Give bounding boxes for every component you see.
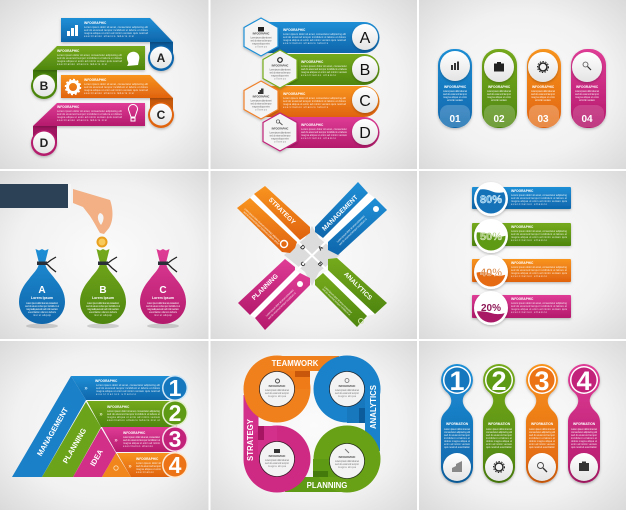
ribbon C: Lorem ipsum dolor sit amet, consectetur adipiscing elit — [84, 82, 148, 86]
bar 20%: magna aliqua ut enim ad minim veniam quis — [511, 307, 568, 311]
hexagon A: magna aliqua enim — [252, 42, 270, 46]
level 2 planning: PLANNING — [61, 426, 88, 465]
bag C: nisi ut aliquip — [154, 313, 173, 317]
bar C: sed do eiusmod tempor incididunt ut labore et dolore — [283, 99, 347, 103]
level 3 idea: » — [114, 438, 118, 444]
card 02: ad minim veniam — [491, 98, 507, 102]
bag B: Lorem ipsum dolor sit amet, consectetur — [87, 301, 119, 305]
bag A: Lorem Ipsum — [31, 296, 53, 300]
blue loop: INFOGRAPHIC — [339, 385, 356, 388]
centre tiles: D — [298, 244, 306, 252]
bottle 3: INFORMATION — [531, 422, 554, 426]
level 3 idea: sed do eiusmod tempor incididunt ut — [123, 438, 160, 442]
green band — [285, 477, 347, 492]
panel: ribbon steps A-D — [0, 0, 208, 169]
bottle 2: consectetur adipiscing elit — [486, 430, 512, 434]
level 1 management: magna aliqua ut enim ad minim veniam quis nostrud — [96, 389, 161, 393]
ribbon D: exercitation ullamco laboris nisi — [57, 118, 107, 122]
bag B: B — [99, 285, 107, 296]
bar 20%: 20% — [481, 303, 501, 314]
arm: planning: Lorem ipsum dolor sit amet consectetur — [265, 288, 295, 317]
card 02 — [482, 49, 517, 128]
bag B: sed do eiusmod tempor incididunt ut — [86, 304, 120, 308]
pink loop: magna aliqua — [268, 465, 287, 468]
ribbon B: sed do eiusmod tempor incididunt ut labore et dolore — [57, 56, 123, 60]
bar C: C — [359, 93, 371, 110]
bar C: Lorem ipsum dolor sit amet, consectetur adipiscing elit — [283, 96, 346, 100]
arm: analytics: Lorem ipsum dolor sit amet consectetur — [323, 285, 353, 314]
card 03: ad minim veniam — [535, 98, 551, 102]
orange loop: magna aliqua — [268, 395, 287, 398]
hexagon D: ullamco — [274, 140, 287, 144]
bar 50%: Lorem ipsum dolor sit amet, consectetur adipiscing — [511, 229, 568, 233]
card 04: magna aliqua ut enim — [575, 95, 599, 99]
sleeve and hand — [0, 184, 112, 234]
bar D: Lorem ipsum dolor sit amet, consectetur — [301, 127, 347, 131]
bar D: magna aliqua ut enim ad minim veniam — [301, 133, 347, 137]
bottle 2: incididunt ut labore et — [486, 436, 512, 440]
hexagon A: sed do eiusmod tempor — [250, 40, 272, 42]
panel: hexagon bars A-D — [210, 0, 417, 169]
number circle 4 — [162, 452, 188, 478]
bar 80%: Lorem ipsum dolor sit amet, consectetur adipiscing — [511, 193, 568, 197]
level 2 planning: magna aliqua ut enim ad minim veniam — [107, 415, 160, 419]
label: analytics: ANALYTICS — [369, 385, 378, 429]
number circle 3 — [162, 426, 188, 452]
bar 50%: INFOGRAPHIC — [511, 225, 534, 229]
level 3 idea: exercitation ullamco — [123, 444, 154, 448]
bar 80%: 80% — [480, 194, 502, 206]
bar A: A — [360, 30, 371, 47]
label: planning: PLANNING — [307, 481, 347, 490]
ribbon C: magna aliqua ut enim ad minim veniam quis nostrud — [84, 88, 149, 92]
bottle 4: INFORMATION — [573, 422, 596, 426]
level 4 triangle: sed do eiusmod tempor — [136, 464, 161, 468]
card 03: INFOGRAPHIC — [532, 85, 555, 89]
level 1 management — [12, 376, 177, 477]
card 02: INFOGRAPHIC — [488, 85, 511, 89]
bag C: magna aliqua ut enim ad minim veniam — [147, 307, 179, 311]
bottle 1: consectetur adipiscing elit — [444, 430, 470, 434]
bottle 1: Lorem ipsum dolor sit amet — [444, 427, 470, 431]
hexagon B: magna aliqua enim — [271, 74, 289, 78]
card 01: 01 — [449, 114, 461, 125]
hexagon C: INFOGRAPHIC — [253, 96, 270, 98]
bottle 2: quis nostrud exercitation — [486, 445, 513, 449]
pink loop: Lorem ipsum dolor sit amet — [265, 459, 289, 462]
hexagon D: magna aliqua enim — [271, 138, 289, 140]
green loop: Lorem ipsum dolor sit amet — [335, 460, 359, 463]
bottle 2: 2 — [491, 366, 507, 396]
ribbon C: INFOGRAPHIC — [84, 78, 107, 82]
card 03: sed do eiusmod tempor — [531, 92, 555, 96]
level 1 management: » — [84, 386, 88, 392]
card 01: Lorem ipsum dolor sit amet — [443, 89, 467, 93]
card 02: 02 — [493, 114, 505, 125]
card 01: sed do eiusmod tempor — [443, 92, 467, 96]
ribbon A: INFOGRAPHIC — [84, 21, 107, 25]
number circle 2 — [162, 400, 188, 426]
bag B: nisi ut aliquip — [94, 313, 113, 317]
bar 80% — [472, 182, 571, 220]
bottle 2: dolore magna aliqua ut — [486, 439, 512, 443]
bottle 3: incididunt ut labore et — [529, 436, 555, 440]
label: strategy: STRATEGY — [246, 418, 255, 461]
arm: planning: PLANNING — [251, 273, 280, 302]
hexagon B — [263, 50, 297, 88]
bottle 1: dolore magna aliqua ut — [444, 439, 470, 443]
card 02: Lorem ipsum dolor sit amet — [487, 89, 511, 93]
bag A — [19, 249, 65, 328]
ribbon A: A — [157, 51, 166, 65]
bar D: D — [359, 125, 371, 142]
number circle 4: 4 — [169, 452, 182, 478]
orange loop — [244, 356, 310, 422]
level 1 management: exercitation ullamco — [96, 392, 137, 396]
ribbon A: sed do eiusmod tempor incididunt ut labore et dolore — [84, 28, 149, 32]
green loop: INFOGRAPHIC — [339, 456, 356, 459]
arm: analytics: sed do eiusmod tempor incididunt ut — [321, 287, 352, 317]
arm: management: sed do eiusmod tempor incididunt ut — [338, 217, 368, 246]
bar C: exercitation ullamco laboris — [283, 105, 329, 109]
bag C: Lorem ipsum dolor sit amet, consectetur — [147, 301, 179, 305]
bar 20%: sed do eiusmod tempor incididunt ut labore et — [511, 304, 567, 308]
blue band — [365, 389, 380, 451]
hexagon C — [244, 81, 278, 119]
number circle 3: 3 — [169, 426, 181, 452]
arm: strategy — [237, 186, 310, 253]
card 01: INFOGRAPHIC — [444, 85, 467, 89]
arm: strategy: STRATEGY — [267, 197, 297, 227]
orange band — [277, 356, 339, 371]
bottle 3: consectetur adipiscing elit — [529, 430, 555, 434]
hexagon C: magna aliqua enim — [252, 106, 270, 108]
centre tiles: A — [318, 245, 325, 252]
level 3 idea — [73, 427, 177, 477]
orange loop: Lorem ipsum dolor sit amet — [265, 389, 289, 392]
panel: pyramid — [0, 341, 208, 510]
bag B: exercitation ullamco laboris — [89, 310, 118, 314]
bag B: Lorem Ipsum — [92, 296, 114, 300]
card 04: sed do eiusmod tempor — [575, 92, 599, 96]
card 03 — [527, 49, 561, 128]
bar 40% — [472, 255, 571, 292]
card 04: Lorem ipsum dolor sit amet — [575, 89, 599, 93]
ribbon D: INFOGRAPHIC — [57, 105, 80, 109]
bag C: C — [159, 285, 167, 296]
ribbon B: magna aliqua ut enim ad minim veniam quis nostrud — [57, 59, 123, 63]
level 4 triangle: Lorem ipsum dolor sit — [136, 461, 161, 465]
bar B: Lorem ipsum dolor sit amet, consectetur — [301, 64, 347, 68]
bar D: exercitation ullamco — [301, 136, 337, 140]
bar 80%: sed do eiusmod tempor incididunt ut labore et — [511, 196, 567, 200]
bar D: INFOGRAPHIC — [301, 123, 324, 127]
hexagon D: INFOGRAPHIC — [272, 128, 289, 130]
orange loop: sed do eiusmod tempor — [265, 392, 289, 395]
ribbon A: exercitation ullamco laboris nisi — [84, 34, 134, 38]
green loop: magna aliqua — [338, 466, 357, 469]
bag C: exercitation ullamco laboris — [149, 310, 178, 314]
bar 80%: exercitation ullamco — [511, 202, 548, 206]
bottle 1: enim ad minim veniam — [444, 442, 470, 446]
hexagon D: sed do eiusmod tempor — [270, 134, 291, 138]
bottle 1 — [441, 364, 473, 483]
bar B: sed do eiusmod tempor incididunt ut labore — [301, 67, 348, 71]
bar 40%: INFOGRAPHIC — [511, 261, 534, 265]
ribbon D: sed do eiusmod tempor incididunt ut labore et dolore — [57, 112, 123, 116]
bar B: magna aliqua ut enim ad minim veniam — [301, 70, 347, 74]
bar B — [285, 54, 379, 85]
card 01: magna aliqua ut enim — [443, 95, 467, 99]
bag C: Lorem Ipsum — [152, 296, 174, 300]
bar 50%: exercitation ullamco — [511, 238, 548, 242]
card 02: sed do eiusmod tempor — [487, 92, 511, 96]
bottle 3: sed do eiusmod tempor — [529, 433, 555, 437]
ribbon C: exercitation ullamco laboris nisi — [84, 91, 134, 95]
bar 40%: Lorem ipsum dolor sit amet, consectetur adipiscing — [511, 265, 568, 269]
hexagon D — [263, 113, 297, 151]
bar B: INFOGRAPHIC — [301, 60, 324, 64]
card 04: INFOGRAPHIC — [576, 85, 599, 89]
hexagon D: Lorem ipsum dolor sit amet — [270, 132, 291, 134]
level 1 management: sed do eiusmod tempor incididunt ut labore et dolore — [96, 386, 161, 390]
green loop: sed do eiusmod tempor — [335, 463, 359, 466]
level 2 planning: exercitation ullamco laboris nisi ut — [107, 418, 160, 422]
arm: planning: sed do eiusmod tempor incididunt ut — [267, 291, 297, 320]
bar 20%: Lorem ipsum dolor sit amet, consectetur adipiscing — [511, 301, 568, 305]
arm: analytics: ANALYTICS — [342, 271, 374, 302]
green loop — [313, 426, 380, 492]
bar 40%: exercitation ullamco — [511, 274, 548, 278]
bottle 2: Lorem ipsum dolor sit amet — [486, 427, 512, 431]
number circle 1: 1 — [169, 375, 182, 401]
ribbon B: Lorem ipsum dolor sit amet, consectetur adipiscing elit — [57, 53, 122, 57]
bottle 2 — [483, 364, 515, 483]
level 1 management: MANAGEMENT — [35, 406, 70, 458]
ribbon D: magna aliqua ut enim ad minim veniam quis nostrud — [57, 115, 123, 119]
panel: percentage bars — [419, 171, 626, 339]
bag A: magna aliqua ut enim ad minim veniam — [26, 307, 58, 311]
bottle 2: INFORMATION — [488, 422, 511, 426]
bag C: sed do eiusmod tempor incididunt ut — [146, 304, 180, 308]
ribbon C: sed do eiusmod tempor incididunt ut labore et dolore — [84, 85, 149, 89]
orange loop: INFOGRAPHIC — [269, 385, 286, 388]
bottle 4: dolore magna aliqua ut — [571, 439, 597, 443]
ribbon A — [61, 18, 174, 71]
hexagon B: ullamco — [274, 78, 287, 80]
bottle 3: 3 — [534, 366, 550, 396]
bottle 3: quis nostrud exercitation — [529, 445, 556, 449]
arm: analytics — [315, 258, 387, 327]
bag C — [140, 249, 186, 328]
bar 50%: 50% — [480, 231, 502, 243]
level 2 planning: sed do eiusmod tempor incididunt ut labore et — [107, 412, 160, 416]
ribbon B: exercitation ullamco laboris nisi — [57, 62, 107, 66]
arm: strategy: Lorem ipsum dolor sit amet consectetur adipiscing — [243, 207, 282, 243]
level 3 idea: INFOGRAPHIC — [123, 431, 146, 435]
bottle 4: Lorem ipsum dolor sit amet — [571, 427, 597, 431]
hexagon B: INFOGRAPHIC — [272, 64, 289, 68]
ribbon B — [31, 46, 145, 99]
blue loop — [314, 356, 380, 423]
blue loop: magna aliqua — [338, 395, 357, 398]
pink band — [244, 395, 258, 459]
ribbon D — [31, 103, 145, 156]
ribbon C — [61, 75, 174, 128]
bag B: magna aliqua ut enim ad minim veniam — [87, 307, 119, 311]
card 04 — [571, 49, 606, 128]
hexagon C: Lorem ipsum dolor sit amet — [251, 100, 272, 102]
level 1 management: INFOGRAPHIC — [95, 379, 118, 383]
level 2 planning: INFOGRAPHIC — [107, 405, 130, 409]
bar A: sed do eiusmod tempor incididunt ut labore et dolore — [283, 35, 347, 39]
number circle 2: 2 — [169, 400, 181, 426]
card 03: Lorem ipsum dolor sit amet — [531, 89, 555, 93]
bottle 1: quis nostrud exercitation — [444, 445, 471, 449]
bottle 1: sed do eiusmod tempor — [444, 433, 470, 437]
level 3 idea: IDEA — [88, 447, 105, 468]
arm: management — [315, 182, 387, 255]
bar D: sed do eiusmod tempor incididunt ut labore — [301, 130, 348, 134]
bottle 4: consectetur adipiscing elit — [571, 430, 597, 434]
panel: looped square — [210, 341, 417, 510]
level 2 planning: » — [99, 412, 103, 418]
bar 80%: magna aliqua ut enim ad minim veniam quis — [511, 199, 568, 203]
panel: numbered bottles — [419, 341, 626, 510]
bag A: nisi ut aliquip — [33, 313, 52, 317]
bar D — [285, 117, 379, 148]
level 3 idea: Lorem ipsum dolor sit amet, consectetur — [123, 435, 160, 439]
bottle 3: Lorem ipsum dolor sit amet — [529, 427, 555, 431]
bar A: exercitation ullamco laboris — [283, 41, 329, 45]
bar A: INFOGRAPHIC — [283, 28, 306, 32]
bottle 3: dolore magna aliqua ut — [529, 439, 555, 443]
number circle 1 — [162, 375, 188, 401]
bottle 4: 4 — [576, 366, 592, 396]
bottle 4: enim ad minim veniam — [571, 442, 597, 446]
bag A: A — [38, 285, 46, 296]
level 4 triangle: magna aliqua ut enim — [136, 467, 161, 471]
panel: X ribbons — [210, 171, 417, 339]
card 04: ad minim veniam — [579, 98, 595, 102]
bar 50% — [472, 219, 571, 256]
bar 20%: exercitation ullamco — [511, 310, 548, 314]
card 03: 03 — [537, 114, 549, 125]
bottle 4: quis nostrud exercitation — [571, 445, 598, 449]
level 3 idea: magna aliqua ut enim ad minim — [123, 441, 160, 445]
pink loop: sed do eiusmod tempor — [265, 462, 289, 465]
ribbon A: magna aliqua ut enim ad minim veniam quis nostrud — [84, 31, 149, 35]
bag A: sed do eiusmod tempor incididunt ut — [25, 304, 59, 308]
centre tiles: B — [316, 261, 324, 269]
label: teamwork: TEAMWORK — [272, 359, 319, 368]
arm: strategy: sed do eiusmod tempor incididunt ut labore dolore — [242, 210, 281, 246]
level 4 triangle — [102, 453, 177, 477]
hexagon A: INFOGRAPHIC — [253, 32, 270, 36]
blue loop: Lorem ipsum dolor sit amet — [335, 389, 359, 392]
panel: pill cards 01-04 — [419, 0, 626, 169]
bottle 1: INFORMATION — [446, 422, 469, 426]
bottle 2: enim ad minim veniam — [486, 442, 512, 446]
centre tiles: C — [300, 261, 308, 268]
bar A: Lorem ipsum dolor sit amet, consectetur adipiscing elit — [283, 32, 346, 36]
centre tiles — [252, 196, 372, 314]
bar 80%: INFOGRAPHIC — [511, 189, 534, 193]
bag A: Lorem ipsum dolor sit amet, consectetur — [26, 301, 58, 305]
hexagon B: sed do eiusmod tempor — [270, 72, 291, 74]
hexagon B: Lorem ipsum dolor sit amet — [270, 68, 291, 72]
bottle 1: incididunt ut labore et — [444, 436, 470, 440]
card 02: magna aliqua ut enim — [487, 95, 511, 99]
bottle 1: 1 — [449, 366, 465, 396]
icon: coin — [96, 236, 108, 248]
level 2 planning — [42, 401, 177, 477]
bar B: B — [360, 62, 370, 79]
bottle 4 — [568, 364, 600, 483]
arm: management: MANAGEMENT — [321, 194, 360, 233]
bar 40%: 40% — [480, 267, 502, 279]
card 01 — [438, 49, 472, 128]
bar 20% — [472, 291, 571, 326]
blue loop: sed do eiusmod tempor — [335, 392, 359, 395]
level 4 triangle: exercitation — [136, 470, 155, 474]
bottle 2: sed do eiusmod tempor — [486, 433, 512, 437]
bottle 3 — [526, 364, 558, 483]
hexagon C: sed do eiusmod tempor — [250, 102, 272, 106]
hexagon A: ullamco — [255, 46, 268, 48]
hexagon A — [244, 18, 278, 56]
bar 50%: sed do eiusmod tempor incididunt ut labore et — [511, 232, 567, 236]
pink loop — [244, 426, 310, 492]
ribbon D: D — [40, 136, 49, 150]
ribbon C: C — [157, 108, 166, 122]
pink loop: INFOGRAPHIC — [269, 455, 286, 458]
bar C — [265, 86, 379, 117]
card 03: magna aliqua ut enim — [531, 95, 555, 99]
arm: planning — [238, 259, 310, 330]
card 01: ad minim veniam — [447, 98, 463, 102]
bar C: magna aliqua ut enim ad minim veniam quis nostrud — [283, 102, 347, 106]
bag B — [80, 249, 126, 328]
bar A — [265, 22, 379, 53]
bar 20%: INFOGRAPHIC — [511, 297, 534, 301]
bottle 4: incididunt ut labore et — [571, 436, 597, 440]
bar 40%: sed do eiusmod tempor incididunt ut labore et — [511, 268, 567, 272]
bar B: exercitation ullamco — [301, 73, 337, 77]
level 2 planning: Lorem ipsum dolor sit amet, consectetur adipiscing — [107, 409, 161, 413]
bag A: exercitation ullamco laboris — [28, 310, 57, 314]
bottle 4: sed do eiusmod tempor — [571, 433, 597, 437]
ribbon B: B — [40, 79, 49, 93]
card 04: 04 — [581, 114, 593, 125]
hexagon C: ullamco — [255, 108, 268, 112]
ribbon A: Lorem ipsum dolor sit amet, consectetur adipiscing elit — [84, 25, 148, 29]
panel: money bags — [0, 171, 208, 339]
arm: management: Lorem ipsum dolor sit amet consectetur — [336, 214, 366, 243]
bar A: magna aliqua ut enim ad minim veniam quis nostrud — [283, 38, 347, 42]
ribbon D: Lorem ipsum dolor sit amet, consectetur adipiscing elit — [57, 109, 122, 113]
bar C: INFOGRAPHIC — [283, 92, 306, 96]
level 4 triangle: INFOGRAPHIC — [136, 457, 159, 461]
bottle 3: enim ad minim veniam — [529, 442, 555, 446]
ribbon B: INFOGRAPHIC — [57, 49, 80, 53]
bar 40%: magna aliqua ut enim ad minim veniam quis — [511, 271, 568, 275]
bar 50%: magna aliqua ut enim ad minim veniam quis — [511, 235, 568, 239]
level 1 management: Lorem ipsum dolor sit amet, consectetur adipiscing elit — [96, 383, 160, 387]
level 4 triangle: » — [128, 464, 132, 470]
hexagon A: Lorem ipsum dolor sit amet — [251, 36, 272, 40]
